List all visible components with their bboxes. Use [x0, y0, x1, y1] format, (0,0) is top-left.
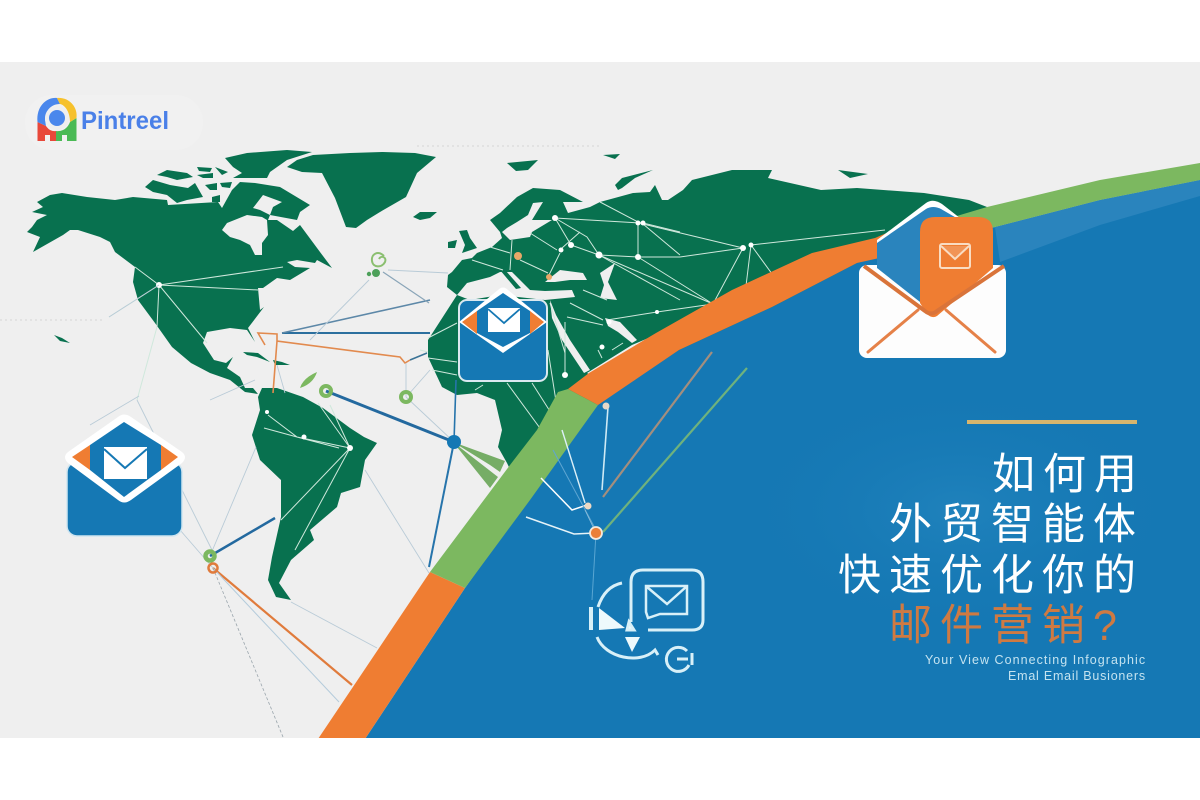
- envelope cross lines: [868, 310, 995, 352]
- green route wedges: [458, 444, 505, 488]
- gold divider: [967, 420, 1137, 424]
- orange lower segment: [318, 572, 465, 739]
- title glow: [730, 380, 1190, 640]
- seas cut into the land: [222, 195, 647, 374]
- lighter blue wedge: [995, 180, 1200, 262]
- network lines on land: [109, 202, 885, 550]
- logo white ring: [45, 106, 69, 130]
- arrow triangle down: [625, 637, 640, 652]
- orange route: [258, 333, 410, 393]
- Caspian Sea: [600, 263, 617, 300]
- flap white diamond: [65, 414, 185, 502]
- orange lower route: [213, 568, 352, 685]
- grey lower routes: [213, 568, 339, 702]
- envelope body: [459, 300, 547, 381]
- blue flap: [877, 207, 960, 302]
- logo mark: [37, 98, 77, 141]
- ring nodes: [206, 386, 411, 572]
- envelope body: [67, 462, 182, 536]
- Mediterranean: [457, 272, 575, 300]
- play triangle left: [599, 608, 625, 630]
- orange side triangles: [462, 311, 544, 334]
- connection lines over ocean: [90, 270, 456, 737]
- Hudson Bay: [222, 215, 268, 255]
- logo halo: [25, 95, 203, 150]
- Baltic Sea: [502, 202, 552, 240]
- grey routes: [90, 270, 454, 648]
- circular G mark: [666, 647, 689, 671]
- Indian Ocean sliver: [587, 338, 647, 374]
- orange side triangles: [72, 445, 178, 470]
- subtitle line 1: Your View Connecting Infographic: [925, 653, 1146, 667]
- logo blue segment: [37, 98, 60, 126]
- icon: small mail glyph: [940, 244, 970, 268]
- white mail glyph: [104, 447, 147, 479]
- blue ocean field: [365, 180, 1200, 739]
- envelope flap outline: [877, 201, 965, 280]
- world map: [27, 150, 987, 600]
- blue field nodes: [584, 402, 610, 539]
- Italy peninsula: [502, 272, 521, 289]
- blue hub node: [447, 435, 461, 449]
- logo: [37, 98, 169, 141]
- Persian Gulf: [605, 318, 637, 343]
- logo red segment: [38, 122, 56, 141]
- envelope body: [859, 265, 1006, 358]
- mail fold: [488, 309, 520, 323]
- flap white diamond: [459, 288, 547, 353]
- continent: UK and Ireland: [448, 230, 477, 253]
- thick blue route: [326, 391, 454, 442]
- icon: large open envelope: [859, 201, 1006, 358]
- green spiral marker: [367, 253, 385, 277]
- green leaf marker: [300, 372, 317, 388]
- dashed guide lines: [0, 146, 600, 320]
- continent: Eurasia and Africa: [428, 170, 987, 490]
- Red Sea: [550, 300, 590, 373]
- blue diamond flap: [477, 293, 530, 347]
- network nodes: [156, 215, 754, 451]
- orange upper segment: [568, 218, 960, 405]
- Foxe Basin: [253, 195, 282, 215]
- logo yellow segment: [57, 98, 77, 122]
- icon: middle envelope: [459, 288, 547, 381]
- arctic islands: [54, 150, 868, 365]
- network lines over blue field: [526, 352, 747, 600]
- cycle arc upper: [598, 583, 622, 607]
- mail in bubble: [646, 586, 687, 618]
- chat bubble: [631, 570, 703, 630]
- logo blue dot: [49, 110, 65, 126]
- cycle arc lower: [597, 637, 658, 658]
- flap fold line: [864, 266, 1004, 314]
- white mail glyph: [488, 308, 520, 332]
- icon: left envelope: [65, 414, 185, 536]
- left bar: [589, 607, 593, 630]
- Black Sea: [545, 270, 587, 282]
- green upper segment: [950, 163, 1200, 240]
- continent: South America: [252, 388, 377, 600]
- icon: chat and mail cycle: [591, 570, 703, 671]
- title: [838, 451, 1145, 650]
- continent: North America: [27, 182, 332, 394]
- mail fold: [104, 449, 147, 468]
- subtitle: [925, 653, 1146, 683]
- arc band segments: [318, 163, 1200, 739]
- blue routes: [282, 332, 430, 334]
- small arrowhead: [627, 622, 634, 630]
- title line 1: 如何用: [992, 451, 1145, 499]
- title line 4: 邮件营销?: [889, 602, 1125, 650]
- logo wordmark: Pintreel: [81, 107, 169, 135]
- green middle segment: [430, 389, 598, 588]
- blue diamond flap: [90, 422, 161, 497]
- logo green segment: [56, 118, 76, 141]
- small orange markers: [514, 252, 552, 280]
- title line 2: 外贸智能体: [889, 501, 1144, 549]
- subtitle line 2: Emal Email Busioners: [1008, 669, 1146, 683]
- orange letter: [920, 217, 993, 317]
- G mark bar: [677, 653, 692, 665]
- continent: Greenland: [287, 152, 436, 228]
- title line 3: 快速优化你的: [838, 552, 1144, 600]
